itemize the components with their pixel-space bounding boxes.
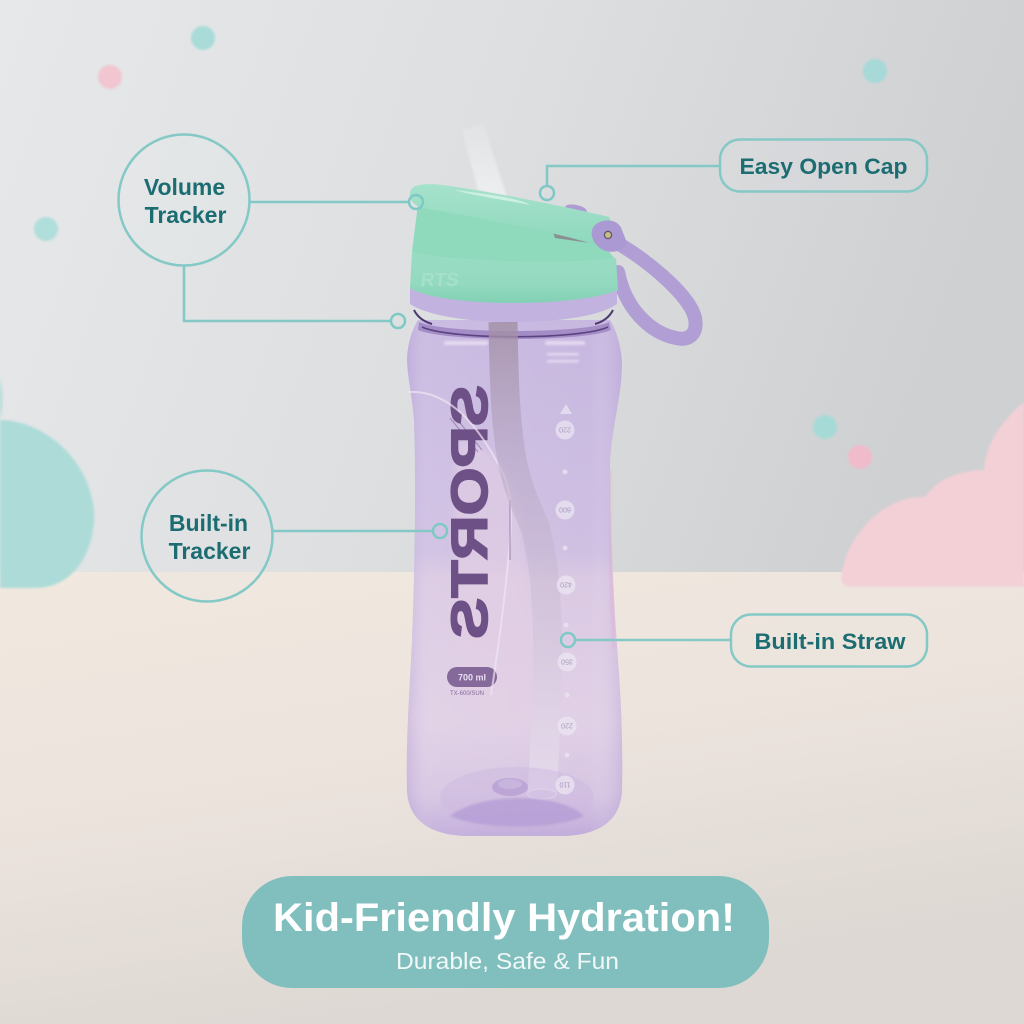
capacity badge: [447, 667, 497, 697]
lid opening highlight: [455, 190, 530, 205]
callout: Easy Open Cap: [540, 140, 927, 200]
banner: [242, 876, 769, 988]
neck threads: [414, 310, 613, 339]
cap recess: [553, 232, 590, 243]
right pink cloud: [841, 402, 1024, 587]
grip panel contour: [408, 392, 511, 695]
flip lid: [410, 184, 612, 245]
mirrored SPORTS lettering: SPORTS: [441, 385, 498, 639]
hinge rivet: [604, 231, 612, 239]
cap lettering: RTS: [419, 270, 460, 291]
right pink edge glow: [609, 470, 614, 650]
highlights: [444, 341, 585, 362]
volume marks: [556, 404, 576, 794]
volume numbers: 600: [559, 506, 571, 512]
pivot hinge: [592, 220, 627, 252]
inner pink shadow: [454, 440, 536, 730]
banner subtitle: Durable, Safe & Fun: [396, 948, 619, 974]
mint cap dome: [412, 205, 614, 261]
straw opening: [528, 789, 556, 799]
banner title: Kid-Friendly Hydration!: [273, 896, 735, 940]
volume numbers: 220: [559, 426, 571, 432]
background floor: [0, 572, 1024, 1024]
internal straw: [503, 322, 548, 795]
callout: Volume Tracker: Volume: [144, 174, 225, 200]
volume numbers: 220: [561, 722, 573, 728]
left teal cloud: [0, 378, 94, 588]
capacity badge: 700 ml: [458, 672, 486, 682]
callout: Built-in Tracker: [142, 470, 447, 602]
volume numbers: 420: [560, 580, 572, 588]
volume numbers: 110: [559, 780, 571, 788]
mint cap ring: [410, 252, 618, 303]
lid rear purple tab: [564, 203, 588, 215]
body edge shading: [407, 320, 622, 836]
callout: Volume Tracker: Tracker: [145, 202, 226, 228]
volume numbers: 350: [561, 658, 573, 664]
callout: Built-in Straw: [561, 614, 927, 666]
handle loop: [612, 240, 696, 339]
bottle body: [407, 320, 622, 836]
capacity badge: TX-600/SUN: [450, 691, 484, 697]
callout: Built-in Straw: Built-in Straw: [754, 629, 906, 654]
lavender collar: [410, 288, 617, 322]
decorative dots: [34, 26, 887, 469]
callout: Built-in Tracker: Tracker: [169, 538, 250, 564]
callout: Easy Open Cap: Easy Open Cap: [740, 154, 908, 179]
volume numbers: [559, 426, 573, 788]
icon: straw above lid: [462, 123, 507, 197]
bottle base: [440, 767, 594, 827]
callout: Volume Tracker: [118, 134, 423, 328]
background wall: [0, 0, 1024, 574]
callout: Built-in Tracker: Built-in: [169, 510, 248, 536]
water bottle: [407, 123, 696, 836]
